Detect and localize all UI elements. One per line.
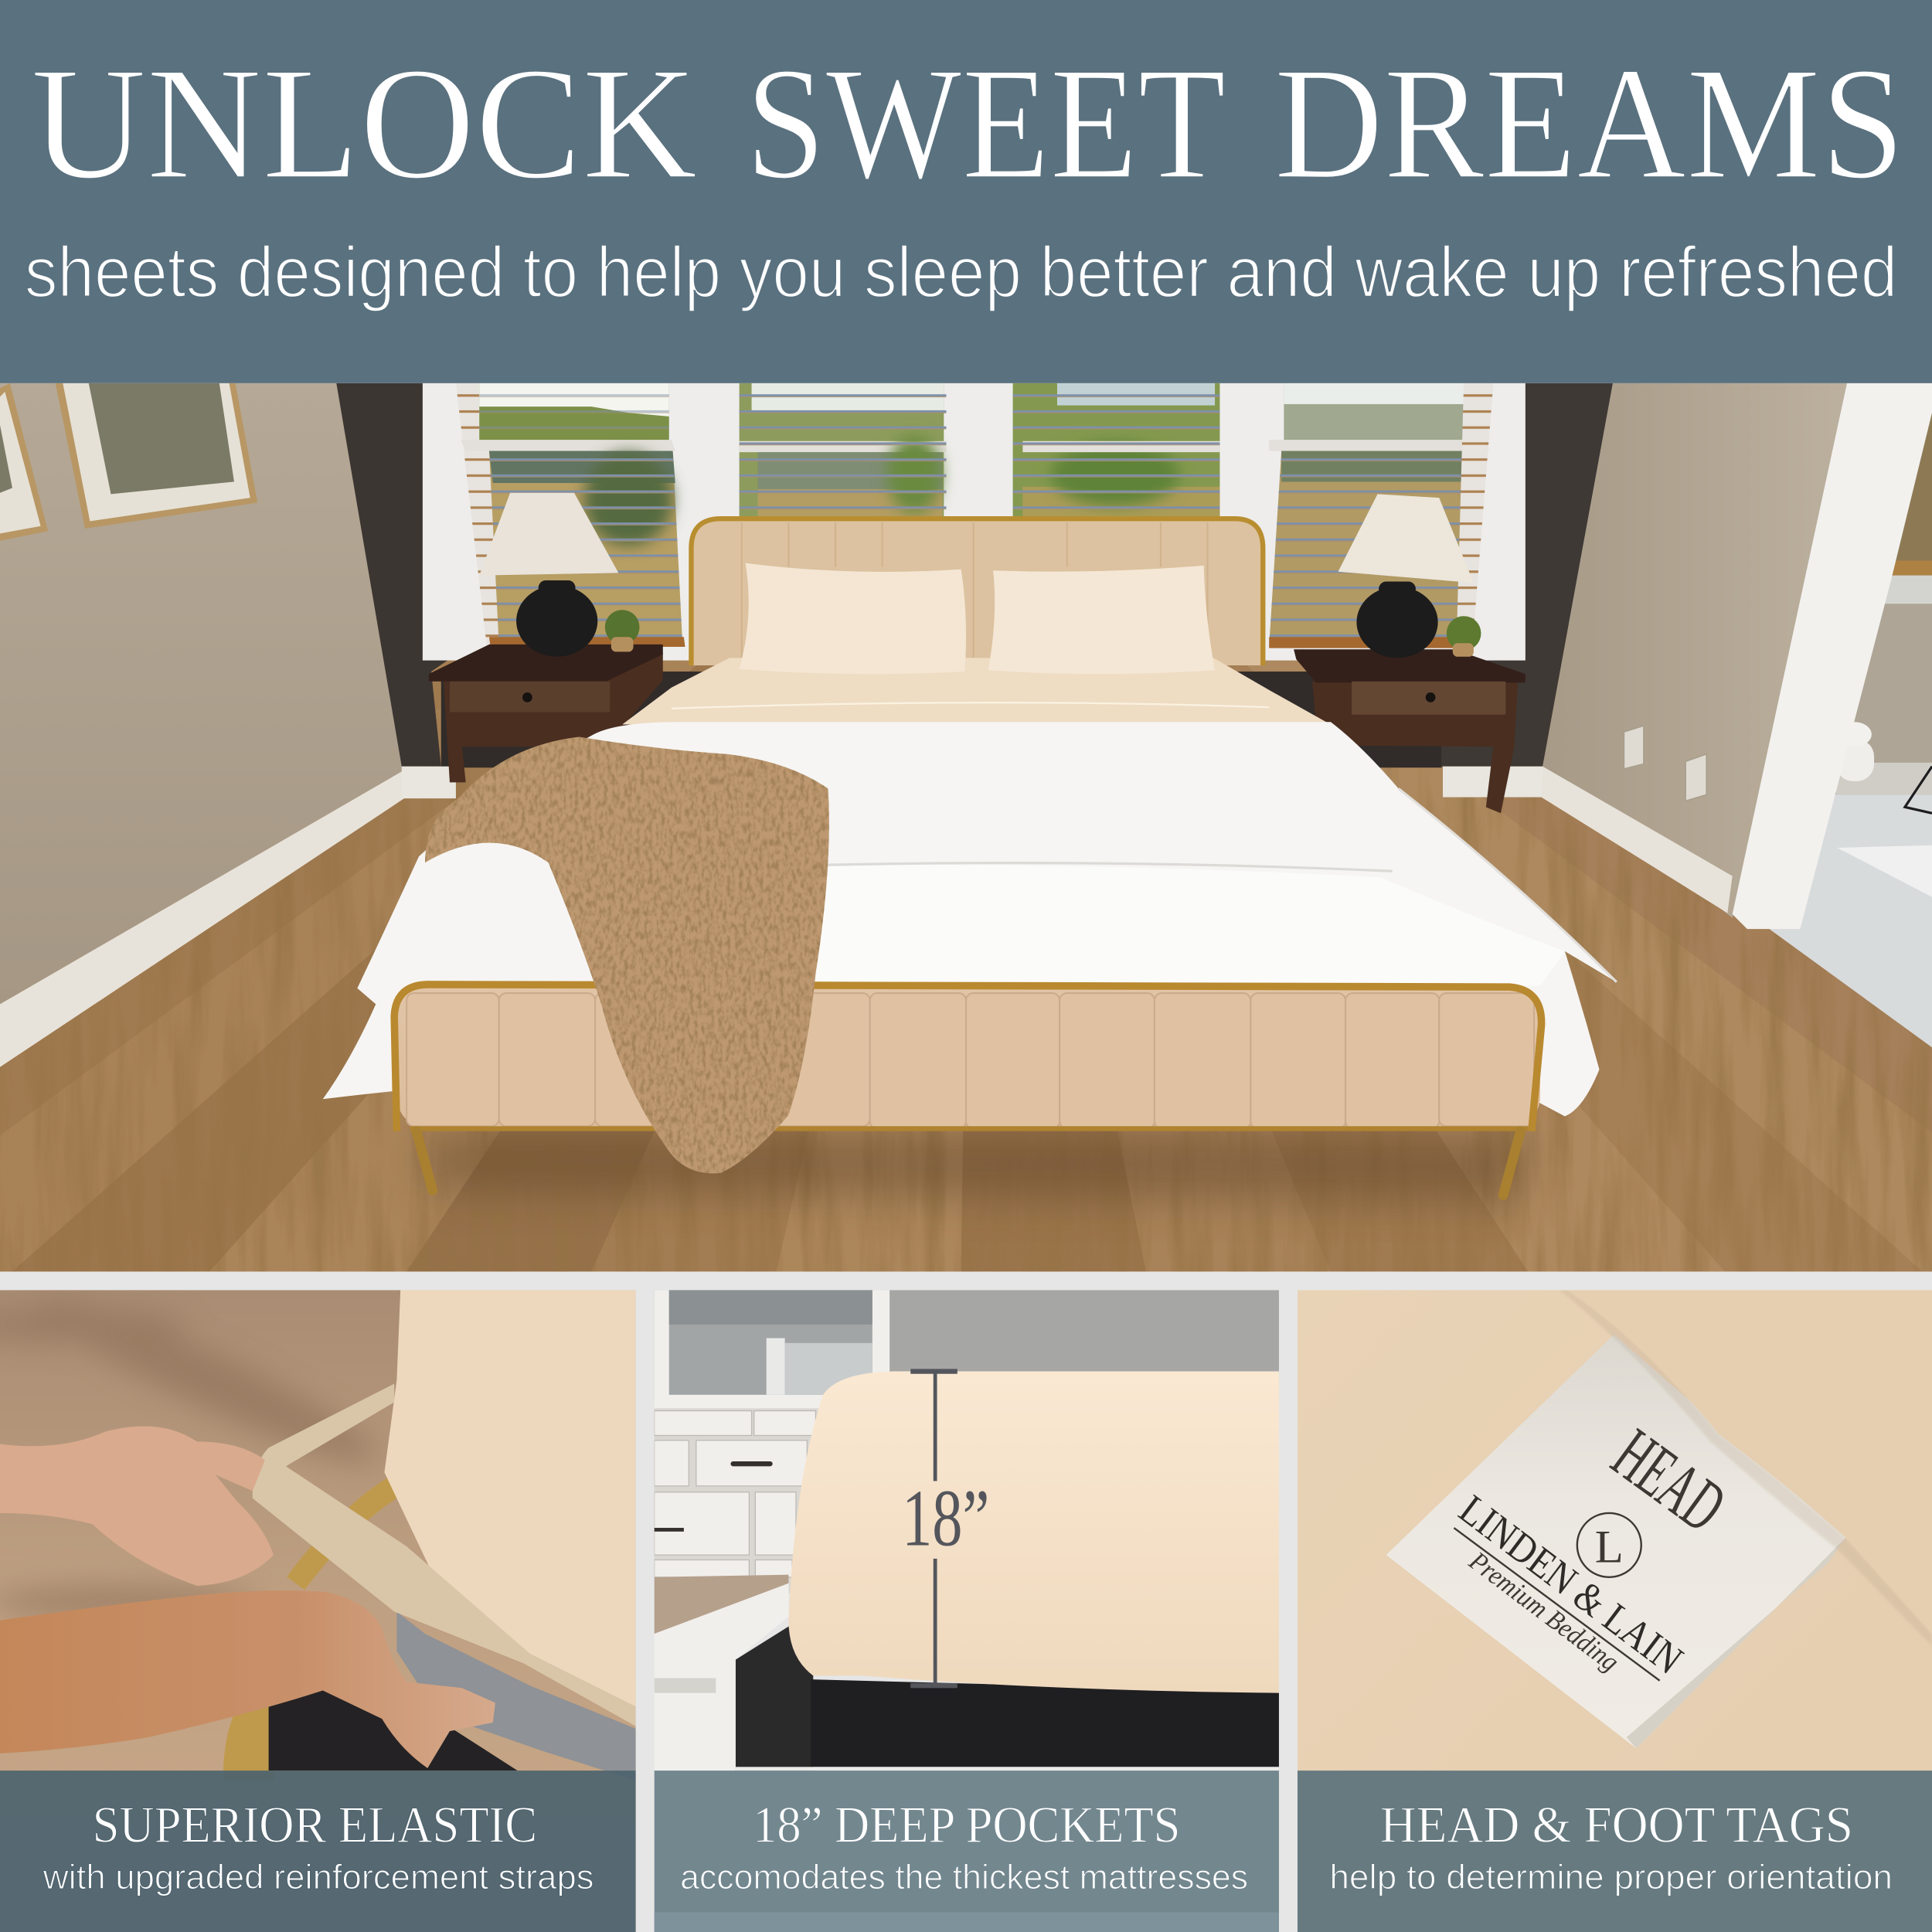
- sheet fold line: [672, 702, 1269, 709]
- window 2: [740, 383, 946, 516]
- upper hand: [0, 1427, 274, 1586]
- gray mattress edge: [396, 1611, 636, 1781]
- caption band: [655, 1770, 1279, 1932]
- title: SWEET: [746, 35, 1226, 213]
- caption text: 18” DEEP POCKETS: [753, 1797, 1180, 1854]
- rail molding: [655, 1679, 716, 1693]
- sheet background: [1298, 1290, 1932, 1932]
- dark accent wall right: [1441, 383, 1613, 767]
- fitted sheet: [622, 658, 1331, 725]
- dark accent wall left: [336, 383, 458, 767]
- bathroom doorway: [1770, 383, 1932, 1047]
- window 4: [1269, 383, 1493, 648]
- footboard: [394, 985, 1542, 1131]
- right lamp: [1338, 494, 1474, 658]
- title: DREAMS: [1274, 35, 1905, 213]
- caption text: [680, 1797, 1248, 1896]
- caption text: with upgraded reinforcement straps: [43, 1859, 594, 1896]
- base strip: [736, 1767, 1279, 1770]
- tagline: Premium Bedding: [1463, 1546, 1624, 1677]
- black box spring: [811, 1679, 1279, 1767]
- title: UNLOCK: [31, 35, 697, 213]
- sheet flap: [1567, 1290, 1932, 1634]
- title: [31, 35, 1905, 213]
- right pillow: [988, 566, 1215, 674]
- headboard: [691, 519, 1263, 665]
- wood floor: [0, 624, 1932, 1272]
- left nightstand: [429, 645, 663, 782]
- mattress with fitted sheet: [788, 1372, 1279, 1693]
- sewn tag: [1386, 1335, 1845, 1748]
- blurred floor backdrop: [0, 1290, 636, 1932]
- left lamp: [479, 493, 618, 657]
- caption text: HEAD & FOOT TAGS: [1380, 1797, 1853, 1854]
- lower arm and hand: [0, 1590, 495, 1768]
- panel: head and foot tags: [1298, 1290, 1932, 1932]
- faux fur throw: [425, 736, 829, 1173]
- tag shaded edge: [1627, 1538, 1845, 1748]
- right plant: [1447, 616, 1481, 657]
- white bed rail: [655, 1583, 788, 1770]
- window 3: [1013, 383, 1219, 516]
- outlets: [1624, 726, 1706, 801]
- mirror: [655, 1290, 889, 1410]
- mattress top beyond: [655, 1575, 788, 1634]
- elastic strap: [253, 1383, 636, 1726]
- flap shadow: [1560, 1290, 1932, 1646]
- bed legs: [417, 1131, 1520, 1196]
- back baseboard: [402, 767, 1545, 798]
- left wall: [0, 383, 404, 1004]
- panel: superior elastic: [0, 1277, 636, 1932]
- tag word head: HEAD: [1598, 1413, 1740, 1547]
- white dresser: [655, 1408, 821, 1594]
- black base: [269, 1675, 518, 1770]
- fitted sheet: [384, 1290, 636, 1725]
- caption text: [43, 1797, 594, 1896]
- blurred floor bands: [0, 1277, 389, 1617]
- framed picture 2: [0, 383, 48, 541]
- right nightstand: [1294, 649, 1526, 813]
- caption text: accomodates the thickest mattresses: [680, 1859, 1248, 1896]
- brand name: LINDEN & LAIN: [1451, 1486, 1691, 1683]
- brand rule: [1454, 1528, 1660, 1681]
- panel: deep pockets: [655, 1290, 1279, 1932]
- window wall: [423, 383, 1526, 661]
- right wall: [1543, 383, 1849, 918]
- measure label: 18”: [902, 1472, 989, 1563]
- floor shadow under bed: [425, 1131, 1528, 1202]
- caption text: SUPERIOR ELASTIC: [93, 1797, 537, 1854]
- dark bed recess: [736, 1627, 813, 1770]
- lower band tint: [655, 1912, 1279, 1932]
- caption text: help to determine proper orientation: [1329, 1859, 1893, 1896]
- logo: [1577, 1513, 1641, 1577]
- lower back wall: [441, 672, 1441, 767]
- depth measure: [910, 1369, 957, 1688]
- left baseboard: [0, 770, 404, 1067]
- wall: [655, 1290, 1279, 1401]
- caption text: [1329, 1797, 1893, 1896]
- tag print: [1451, 1413, 1740, 1683]
- logo: L: [1595, 1522, 1624, 1573]
- caption band: [0, 1770, 636, 1932]
- left pillow: [740, 563, 966, 674]
- header banner: [0, 0, 1932, 383]
- left plant: [605, 610, 639, 651]
- framed picture 1: [56, 383, 257, 529]
- main bedroom photo: [0, 383, 1932, 1271]
- door frame: [1733, 383, 1932, 929]
- white comforter: [323, 722, 1617, 1117]
- window 1: [456, 383, 685, 647]
- right baseboard: [1542, 767, 1733, 913]
- gold bed frame: [296, 1481, 404, 1583]
- caption band: [1298, 1770, 1932, 1932]
